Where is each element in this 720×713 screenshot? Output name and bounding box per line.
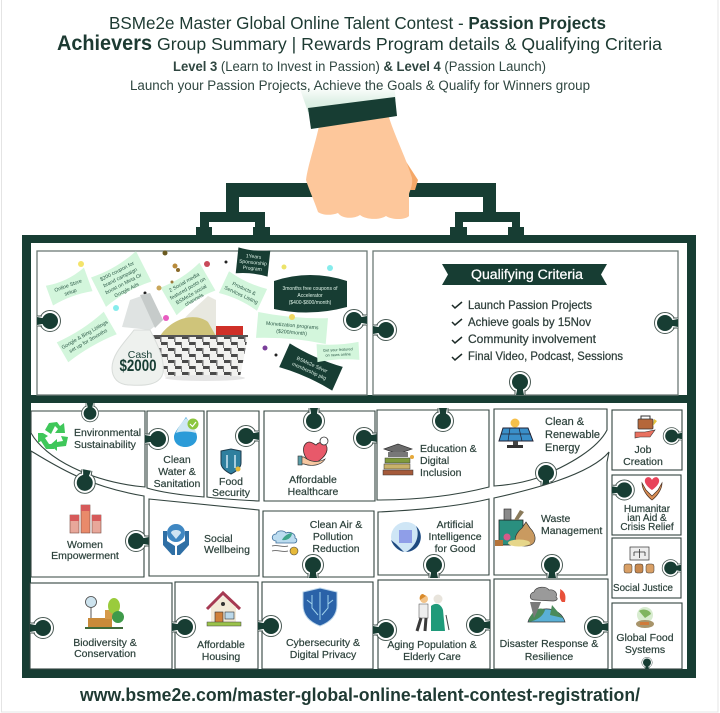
icon: cloud and leaf xyxy=(272,531,298,555)
reward note: accelerator coupons: Accelerator xyxy=(297,293,323,299)
panel: clean air: Clean Air & xyxy=(310,519,362,531)
icon: house xyxy=(207,593,241,626)
title: BSMe2e Master Global Online Talent Contest - Passion Projects xyxy=(109,13,606,33)
reward note: listings: Google & Bing Listings xyxy=(61,319,110,351)
panel: waste management: Management xyxy=(541,525,602,537)
panel: food security: Security xyxy=(212,487,251,499)
reward note: social posts xyxy=(160,263,216,315)
icon: heart in hand xyxy=(298,437,328,465)
icon: solar panel xyxy=(499,418,533,448)
panel: women empowerment: Empowerment xyxy=(51,550,119,562)
reward note: sponsorship: 1Years xyxy=(246,253,262,261)
panel: humanitarian aid: ian Aid & xyxy=(627,513,667,524)
briefcase handle xyxy=(196,183,524,236)
banner: Qualifying Criteria xyxy=(471,267,584,282)
panel: affordable healthcare: Healthcare xyxy=(288,486,339,498)
money bag xyxy=(112,293,163,385)
reward note: coupon: boost on Meta Or xyxy=(105,272,143,296)
panel: rewards xyxy=(37,247,367,395)
panel: food security xyxy=(207,411,259,501)
confetti xyxy=(78,250,333,356)
icon: storm and globe xyxy=(528,587,565,622)
panel: cybersecurity: Digital Privacy xyxy=(290,649,357,661)
icon: tiger and tree xyxy=(85,596,124,629)
reward note: accelerator coupons xyxy=(274,275,347,313)
reward note: social posts: BSMe2e social xyxy=(175,284,208,306)
reward note: coupon: Google Ads xyxy=(114,282,141,299)
panel: affordable healthcare xyxy=(264,408,377,501)
panel: social wellbeing: Social xyxy=(204,533,233,545)
reward note: products listing: Products & xyxy=(231,281,257,297)
cash label: Cash xyxy=(128,349,152,361)
panel: environmental sustainability xyxy=(31,403,145,487)
reward note: social posts: featured posts on xyxy=(169,276,207,302)
reward note: listings xyxy=(55,312,117,362)
panel: clean air xyxy=(263,511,374,578)
icon: elderly couple xyxy=(417,594,449,631)
panel: clean water: Clean xyxy=(163,454,191,466)
panel: cybersecurity xyxy=(258,582,373,669)
subtitle: Launch your Passion Projects, Achieve the Goals & Qualify for Winners group xyxy=(130,78,590,93)
panel: global food systems: Global Food xyxy=(616,632,674,644)
panel: artificial intelligence: Artificial xyxy=(437,519,473,531)
reward note: accelerator coupons: ($400-$800/month) xyxy=(289,300,332,306)
reward note: social posts: channels xyxy=(184,292,205,308)
briefcase body xyxy=(22,235,696,678)
panel: social wellbeing: Wellbeing xyxy=(204,544,250,556)
panel: education: Digital xyxy=(420,455,449,467)
panel: aging population: Aging Population & xyxy=(387,639,477,651)
panel: women empowerment xyxy=(31,451,149,577)
panel: job creation xyxy=(612,410,682,470)
panel: affordable healthcare: Affordable xyxy=(289,474,337,486)
reward note: coupon: $200 coupon for xyxy=(99,261,136,283)
reward note: sponsorship: Program xyxy=(242,265,262,273)
icon: raised fists xyxy=(70,505,101,533)
icon: food shield xyxy=(221,449,241,474)
reward note: accelerator coupons: 3months free coupons of xyxy=(282,286,338,292)
panel: education: Education & xyxy=(420,443,477,455)
reward note: sponsorship xyxy=(236,247,270,277)
panel: clean water: Sanitation xyxy=(154,478,201,490)
panel: affordable housing xyxy=(172,582,258,669)
criteria list: Achieve goals by 15Nov xyxy=(468,315,591,329)
reward note: featured news: on news online xyxy=(325,352,351,358)
reward note: online store: setup xyxy=(64,288,78,298)
panel: artificial intelligence xyxy=(378,499,489,578)
title: Achievers xyxy=(57,32,152,55)
panel: humanitarian aid: Crisis Relief xyxy=(620,522,674,533)
reward note: silver membership: membership pkg xyxy=(291,361,327,382)
panel: clean water xyxy=(145,411,204,497)
reward note: products listing xyxy=(219,271,267,311)
panel: clean energy: Energy xyxy=(545,442,580,454)
panel: clean air: Pollution xyxy=(313,531,353,543)
panel: disaster response: Resilience xyxy=(525,651,573,663)
subtitle xyxy=(130,59,590,93)
panel: waste management: Waste xyxy=(541,513,571,525)
banner xyxy=(442,264,607,285)
title: Group Summary | Rewards Program details & Qualifying Criteria xyxy=(157,34,662,54)
panel: artificial intelligence: for Good xyxy=(435,543,476,555)
criteria list xyxy=(452,298,623,363)
gift basket xyxy=(153,296,248,381)
panel: social justice: Social Justice xyxy=(613,583,673,594)
reward note: coupon: brand campaign xyxy=(103,267,139,289)
panel: environmental sustainability: Environmental xyxy=(74,427,141,439)
icon: waste bin and bag xyxy=(495,509,535,546)
panel: global food systems xyxy=(612,603,682,669)
icon: AI globe xyxy=(391,522,421,552)
icon: people in hands xyxy=(163,524,189,555)
panel: clean air: Reduction xyxy=(312,543,360,555)
reward note: silver membership xyxy=(279,343,343,391)
panel: food security: Food xyxy=(219,476,243,488)
panel: humanitarian aid xyxy=(612,475,681,535)
panel: biodiversity: Conservation xyxy=(74,648,136,660)
reward note: monetization: ($200/month) xyxy=(276,329,307,337)
hand holding briefcase xyxy=(299,86,418,219)
reward note: monetization: Monetization programs xyxy=(266,321,319,331)
reward note: listings: set up for 3months xyxy=(68,328,109,355)
cash label xyxy=(120,349,156,375)
icon: cyber shield xyxy=(303,588,337,626)
reward note: online store: Online Store xyxy=(54,278,83,294)
reward note: online store xyxy=(44,268,92,306)
panel: job creation: Creation xyxy=(623,456,663,468)
icon: scales and fists xyxy=(624,547,654,573)
panel: affordable housing: Affordable xyxy=(197,639,245,651)
criteria list: Launch Passion Projects xyxy=(468,298,592,312)
reward note: products listing: Services Listing xyxy=(223,285,259,306)
reward note: sponsorship: Sponsorship xyxy=(239,259,267,267)
criteria list: Final Video, Podcast, Sessions xyxy=(468,349,623,363)
panel: social wellbeing xyxy=(149,499,259,576)
icon: briefcase in hand xyxy=(635,416,657,438)
icon: heart in hands xyxy=(642,477,662,500)
panel: aging population xyxy=(373,580,490,669)
reward note: featured news: Get your featured xyxy=(323,347,353,353)
icon: water drop xyxy=(174,417,198,447)
panel: clean water: Water & xyxy=(158,466,196,478)
reward note: social posts: 2 Social media xyxy=(168,272,201,294)
icon: recycle xyxy=(38,422,68,451)
panel: social justice xyxy=(612,538,681,598)
panel: affordable housing: Housing xyxy=(202,651,240,663)
reward note: monetization xyxy=(256,312,328,344)
panel: disaster response: Disaster Response & xyxy=(500,638,598,650)
panel: women empowerment: Women xyxy=(67,539,103,551)
panel: cybersecurity: Cybersecurity & xyxy=(286,637,360,649)
title xyxy=(57,13,662,55)
panel: humanitarian aid: Humanitar xyxy=(624,504,671,515)
criteria list: Community involvement xyxy=(468,332,597,346)
panel: clean energy: Renewable xyxy=(545,429,600,441)
icon: globe and food xyxy=(636,607,654,628)
subtitle: Level 3 (Learn to Invest in Passion) & Level 4 (Passion Launch) xyxy=(173,59,546,74)
panel: disaster response xyxy=(494,579,608,669)
cash label: $2000 xyxy=(120,356,156,375)
panel: artificial intelligence: Intelligence xyxy=(428,531,482,543)
panel: aging population: Elderly Care xyxy=(403,651,461,663)
panel: education xyxy=(377,408,489,500)
panel: waste management xyxy=(494,452,609,578)
panel: clean energy: Clean & xyxy=(545,416,585,428)
icon: books and cap xyxy=(383,444,414,475)
panel: job creation: Job xyxy=(635,444,652,456)
panel: biodiversity: Biodiversity & xyxy=(73,637,137,649)
panel: qualifying criteria xyxy=(373,251,678,395)
panel: environmental sustainability: Sustainability xyxy=(74,439,137,451)
footer url: www.bsme2e.com/master-global-online-talent-contest-registration/ xyxy=(79,685,640,705)
panel: education: Inclusion xyxy=(420,467,462,479)
reward note: silver membership: BSMe2e Silver xyxy=(295,356,328,375)
panel: clean energy xyxy=(494,409,607,486)
panel: global food systems: Systems xyxy=(625,644,665,656)
reward note: coupon xyxy=(90,251,152,307)
reward note: featured news xyxy=(317,342,359,362)
panel: biodiversity xyxy=(30,583,172,669)
